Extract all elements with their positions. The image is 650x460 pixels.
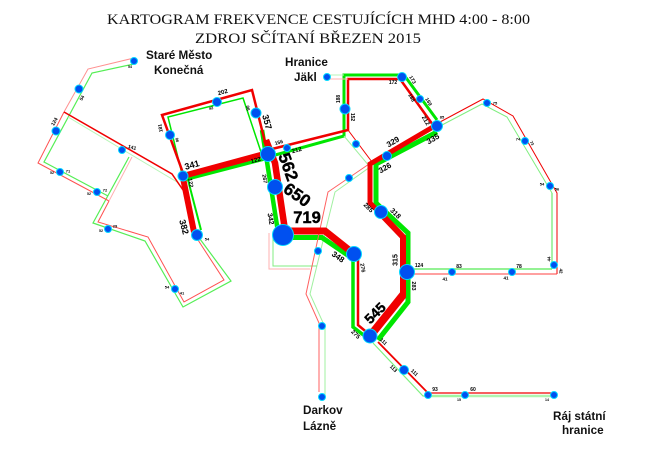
place labels: Ráj státní [553, 410, 606, 423]
title [107, 11, 530, 47]
passenger counts [50, 65, 564, 402]
passenger counts: 318 [388, 207, 402, 221]
passenger counts: 52 [50, 171, 54, 175]
passenger counts: 267 [260, 174, 268, 184]
passenger counts: 212 [291, 147, 303, 155]
passenger counts: 41 [503, 276, 509, 280]
passenger counts: 54 [205, 236, 210, 242]
passenger counts: 85 [440, 114, 445, 120]
passenger counts: 173 [407, 75, 417, 85]
passenger counts: 54 [128, 65, 132, 69]
traffic lines: green direction [44, 64, 554, 396]
passenger counts: 75 [493, 100, 498, 106]
passenger counts: 357 [260, 113, 274, 131]
passenger counts: 326 [377, 160, 394, 175]
title: ZDROJ SČÍTANÍ BŘEZEN 2015 [195, 30, 421, 47]
passenger counts: 285 [362, 202, 375, 215]
passenger counts: 348 [330, 249, 346, 265]
passenger counts: 52 [99, 229, 103, 233]
passenger counts: 212 [420, 115, 430, 127]
place labels [146, 49, 606, 437]
passenger counts: 156 [274, 139, 284, 147]
place labels: Hranice [285, 56, 328, 69]
place labels: Darkov [303, 404, 343, 417]
passenger counts: 60 [470, 387, 476, 393]
passenger counts: 169 [423, 97, 433, 107]
passenger counts: 275 [349, 329, 361, 341]
passenger counts: 122 [186, 178, 194, 188]
passenger counts: 90 [245, 105, 251, 111]
passenger counts: 71 [66, 168, 71, 174]
passenger counts: 41 [442, 276, 448, 282]
passenger counts: 73 [529, 140, 536, 147]
passenger counts: 152 [349, 113, 355, 121]
passenger counts: 29 [113, 224, 118, 228]
passenger counts: 78 [516, 264, 522, 270]
place labels: Jäkl [294, 71, 317, 84]
passenger counts: 124 [415, 263, 423, 269]
passenger counts: 141 [127, 144, 137, 152]
passenger counts: 335 [425, 131, 442, 146]
place labels: hranice [562, 424, 604, 437]
passenger counts: 44 [546, 256, 552, 262]
passenger counts: 54 [165, 284, 170, 290]
passenger counts: 52 [87, 192, 91, 196]
passenger counts: 41 [180, 290, 185, 296]
passenger counts: 113 [388, 364, 398, 374]
passenger counts: 202 [217, 89, 229, 97]
passenger counts: 72 [103, 188, 108, 192]
passenger counts: 74 [516, 136, 521, 142]
place labels: Lázně [303, 420, 337, 433]
passenger counts: 14 [545, 398, 549, 402]
passenger counts: 315 [392, 254, 400, 266]
passenger counts: 90 [174, 137, 180, 143]
passenger counts: 188 [406, 93, 416, 103]
passenger counts: 15 [457, 398, 461, 402]
passenger counts: 188 [336, 95, 342, 103]
passenger counts: 719 [293, 209, 321, 227]
passenger counts: 122 [250, 157, 262, 165]
passenger counts: 111 [378, 337, 388, 347]
passenger counts: 545 [361, 299, 389, 327]
passenger counts: 329 [385, 134, 402, 149]
passenger counts: 342 [266, 213, 274, 225]
traffic lines: red direction [38, 58, 557, 393]
stop nodes [52, 58, 558, 400]
passenger counts: 111 [409, 368, 419, 378]
passenger counts: 276 [358, 263, 366, 273]
passenger counts: 83 [456, 264, 462, 270]
passenger counts: 382 [177, 218, 191, 236]
title: KARTOGRAM FREKVENCE CESTUJÍCÍCH MHD 4:00 - 8:00 [107, 11, 530, 28]
place labels: Staré Město [146, 49, 212, 62]
passenger counts: 172 [389, 80, 397, 86]
passenger counts: 93 [432, 387, 438, 393]
passenger counts: 181 [157, 123, 165, 133]
passenger counts: 42 [208, 105, 215, 111]
passenger counts: 42 [558, 268, 564, 274]
passenger counts: 54 [540, 182, 545, 186]
passenger counts: 341 [183, 158, 201, 172]
passenger counts: 650 [280, 179, 314, 211]
passenger counts: 283 [410, 281, 416, 291]
place labels: Konečná [154, 64, 204, 77]
passenger counts: 56 [555, 186, 560, 192]
passenger counts: 54 [79, 94, 86, 101]
passenger counts: 562 [274, 150, 302, 184]
passenger counts: 124 [50, 117, 60, 127]
